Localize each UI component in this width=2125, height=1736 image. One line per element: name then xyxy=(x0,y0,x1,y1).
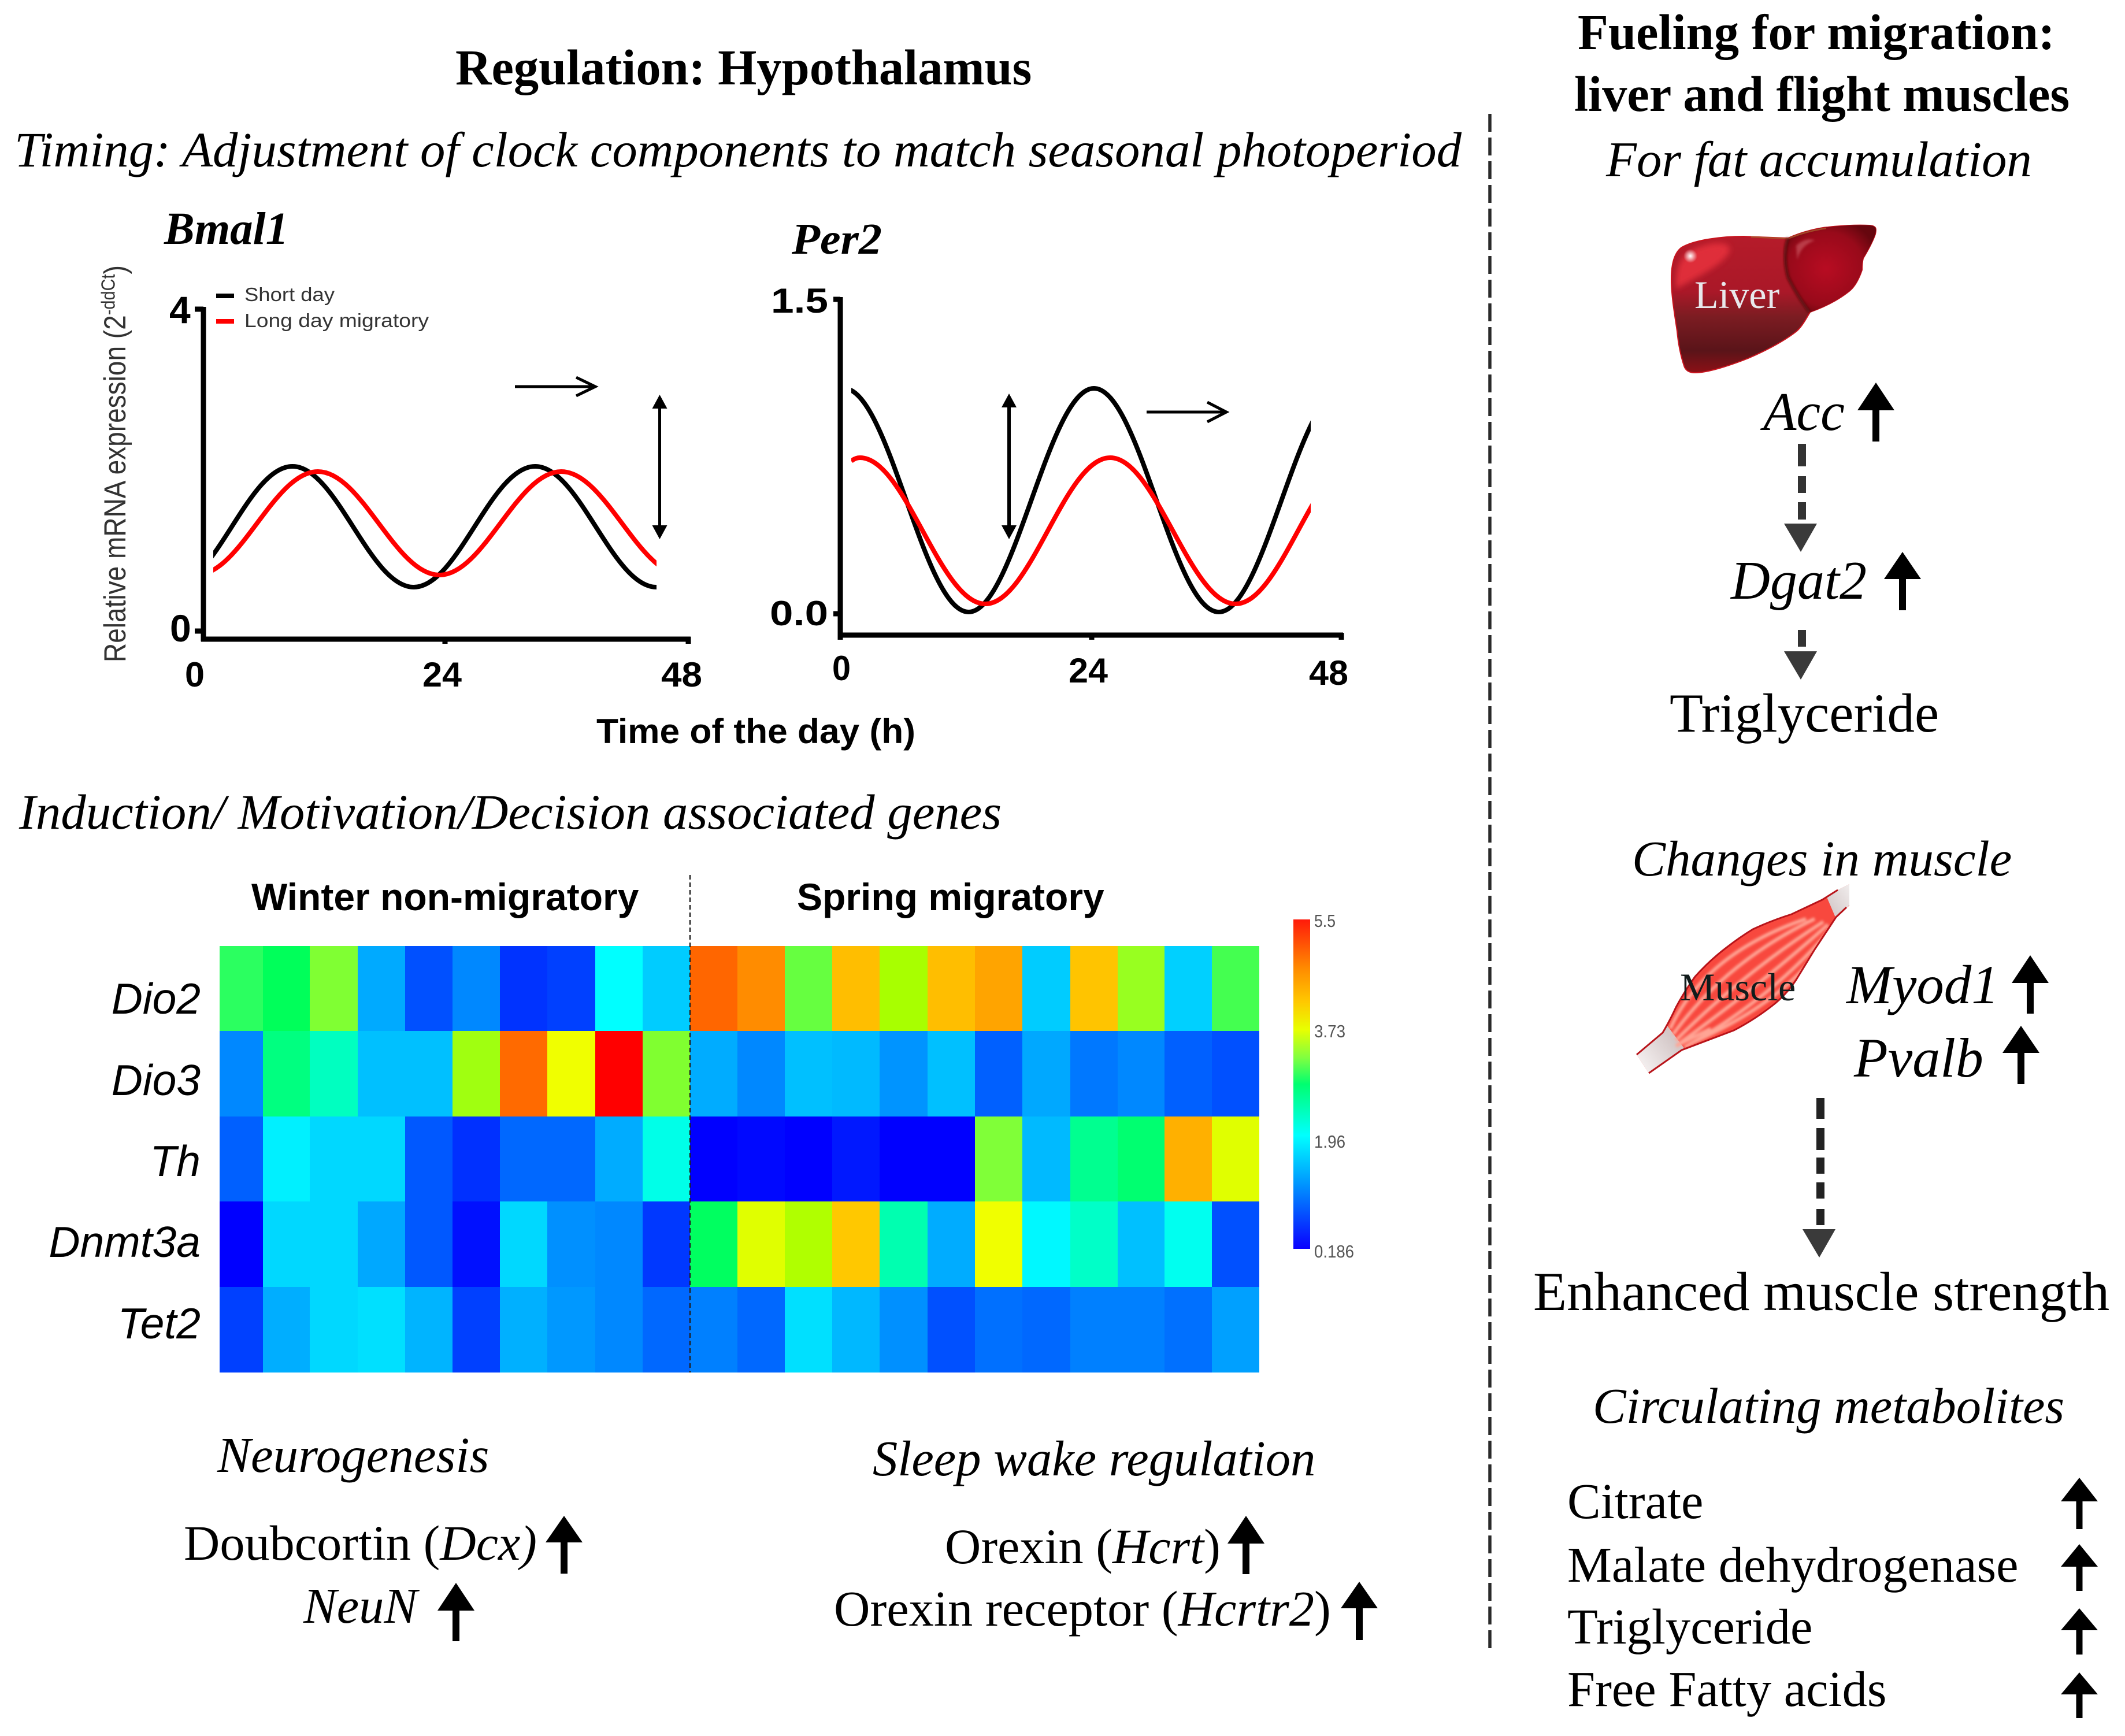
colour scale: 0.186 xyxy=(1314,1241,1354,1262)
text: Pvalb: Pvalb xyxy=(1853,1027,1983,1089)
chart title: Bmal1: Bmal1 xyxy=(164,204,288,254)
title: Regulation Hypothalamus: Regulation: Hypothalamus xyxy=(455,40,1032,95)
x tick labels: 48 xyxy=(1309,654,1348,692)
icon: up arrow xyxy=(2061,1608,2098,1655)
x tick labels: 0 xyxy=(832,649,851,688)
x tick labels xyxy=(832,649,1348,692)
heading: timing: Timing: Adjustment of clock components to match seasonal photoperiod xyxy=(14,122,1462,177)
text: orexin receptor: Orexin receptor (Hcrtr2) xyxy=(834,1581,1331,1637)
text: Myod1: Myod1 xyxy=(1845,954,1999,1015)
x axis title: Time of the day (h) xyxy=(596,712,915,751)
y axis label: Relative mRNA expression (2 xyxy=(98,315,132,662)
y tick labels: 0.0 xyxy=(770,594,828,633)
heading: fueling xyxy=(1574,5,2070,122)
text: Acc: Acc xyxy=(1760,382,1845,442)
metabolite: malate dehydrogenase: Malate dehydrogenase xyxy=(1567,1537,2019,1593)
panel: sleep wake regulation xyxy=(834,1431,1378,1640)
curve: short day xyxy=(171,466,657,587)
icon: up arrow xyxy=(2012,955,2049,1014)
metabolite: citrate: Citrate xyxy=(1567,1474,1703,1529)
text: doubcortin: Doubcortin (Dcx) xyxy=(184,1515,537,1571)
row: Tet2 xyxy=(220,1287,1259,1373)
row: Dio2 xyxy=(220,946,1259,1032)
icon: up arrow xyxy=(2002,1026,2039,1084)
metabolite: free fatty acids: Free Fatty acids xyxy=(1567,1661,1886,1717)
arrow: amplitude xyxy=(1002,394,1017,539)
heading: induction: Induction/ Motivation/Decision associated genes xyxy=(18,784,1002,840)
gene labels xyxy=(49,974,201,1348)
x tick labels: 24 xyxy=(1069,651,1108,690)
y axis label: -ddCt xyxy=(98,274,119,315)
axes xyxy=(195,307,691,644)
heatmap xyxy=(220,946,1259,1373)
heading: fat accumulation: For fat accumulation xyxy=(1605,132,2032,187)
column divider xyxy=(1488,114,1492,1650)
list: metabolites xyxy=(1567,1474,2098,1718)
text: triglyceride: Triglyceride xyxy=(1670,682,1939,744)
chart: Bmal1 xyxy=(98,204,702,694)
text: NeuN: NeuN xyxy=(303,1578,420,1634)
colour scale: 5.5 xyxy=(1314,911,1336,931)
colour scale xyxy=(1293,911,1354,1262)
y axis label: ) xyxy=(98,265,132,274)
y tick labels: 4 xyxy=(169,288,191,331)
y tick labels: 1.5 xyxy=(771,281,828,320)
heading: changes in muscle: Changes in muscle xyxy=(1632,830,2012,886)
legend xyxy=(216,284,429,331)
y tick labels xyxy=(169,288,191,650)
x tick labels: 48 xyxy=(661,655,702,694)
row: Dnmt3a xyxy=(220,1201,1259,1287)
curve: long day migratory xyxy=(196,472,683,575)
colour scale: 3.73 xyxy=(1314,1021,1345,1041)
arrow: phase shift xyxy=(1147,402,1226,422)
legend: Short day xyxy=(244,284,335,305)
heading: sleep wake: Sleep wake regulation xyxy=(873,1431,1315,1486)
icon: up arrow xyxy=(1227,1516,1264,1574)
group label: spring: Spring migratory xyxy=(797,876,1104,918)
x tick labels xyxy=(185,655,702,694)
icon: up arrow xyxy=(2061,1478,2098,1529)
arrow: Dgat2 to triglyceride xyxy=(1784,630,1817,680)
chart title: Per2: Per2 xyxy=(791,215,882,264)
heading: fueling: liver and flight muscles xyxy=(1574,66,2070,122)
row: Dio3 xyxy=(220,1031,1259,1116)
chart: Per2 xyxy=(770,215,1360,692)
x tick labels: 24 xyxy=(422,655,462,694)
colour scale: 1.96 xyxy=(1314,1132,1345,1152)
icon: up arrow xyxy=(437,1583,474,1641)
icon: up arrow xyxy=(2061,1544,2098,1591)
gene labels: Tet2 xyxy=(118,1299,201,1348)
icon: muscle xyxy=(1636,884,1849,1074)
y tick labels xyxy=(770,281,828,633)
panel: neurogenesis xyxy=(184,1427,583,1641)
arrow: amplitude xyxy=(652,395,667,539)
icon: up arrow xyxy=(546,1516,583,1574)
arrow: Acc to Dgat2 xyxy=(1784,444,1817,552)
gene labels: Dnmt3a xyxy=(49,1218,201,1266)
legend: Long day migratory xyxy=(244,310,429,331)
gene labels: Th xyxy=(150,1137,201,1185)
label: Liver: Liver xyxy=(1694,273,1780,317)
metabolite: triglyceride: Triglyceride xyxy=(1567,1599,1812,1655)
x tick labels: 0 xyxy=(185,655,205,694)
gene labels: Dio3 xyxy=(112,1056,201,1104)
text: orexin: Orexin (Hcrt) xyxy=(945,1519,1221,1574)
group label: winter: Winter non-migratory xyxy=(251,876,639,918)
y tick labels: 0 xyxy=(170,607,191,650)
text: enhanced muscle strength: Enhanced muscle strength xyxy=(1533,1261,2109,1322)
curve: long day migratory xyxy=(851,458,1360,604)
label: Muscle: Muscle xyxy=(1680,965,1796,1009)
heading: fueling: Fueling for migration: xyxy=(1578,5,2055,60)
curve: short day xyxy=(844,388,1344,612)
icon: liver xyxy=(1671,225,1876,373)
axes xyxy=(833,297,1343,640)
text: Dgat2: Dgat2 xyxy=(1730,551,1867,611)
icon: up arrow xyxy=(2061,1672,2098,1718)
arrow: phase shift xyxy=(515,377,595,396)
heatmap group separator xyxy=(689,875,691,1373)
heading: neurogenesis: Neurogenesis xyxy=(217,1427,489,1483)
icon: up arrow xyxy=(1341,1582,1378,1640)
arrow: muscle genes to strength xyxy=(1803,1098,1835,1258)
row: Th xyxy=(220,1116,1259,1201)
gene labels: Dio2 xyxy=(112,974,201,1023)
icon: up arrow xyxy=(1884,552,1921,610)
heading: circulating metabolites: Circulating metabolites xyxy=(1593,1378,2064,1434)
icon: up arrow xyxy=(1857,383,1894,442)
